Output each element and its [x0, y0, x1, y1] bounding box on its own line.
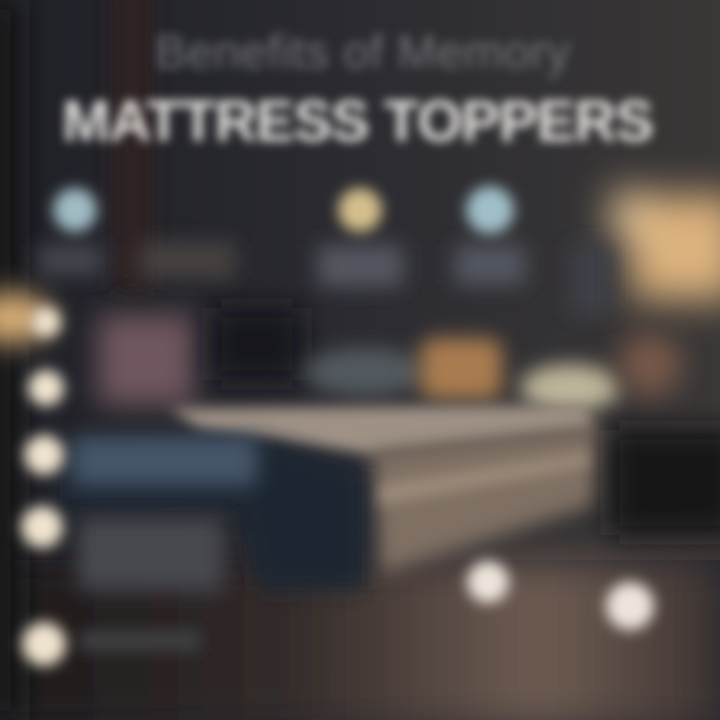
mattress stripe — [378, 452, 590, 505]
dark bedside right — [610, 430, 720, 535]
upper icon cards — [38, 242, 612, 315]
pillow orange — [420, 338, 502, 400]
pillow grey — [305, 348, 425, 396]
top icon: light blue — [466, 186, 514, 234]
lower left panel — [78, 518, 223, 590]
mattress side — [370, 425, 600, 575]
subtitle: Benefits of Memory — [155, 25, 571, 78]
main title: MATTRESS TOPPERS — [62, 89, 653, 154]
floor — [0, 560, 720, 720]
pink panel — [98, 315, 194, 405]
lamp glow left — [0, 292, 50, 344]
right warm pillow — [618, 333, 682, 397]
bottom panel — [80, 630, 200, 652]
floor icons — [467, 561, 654, 630]
left bullet icons — [21, 307, 66, 666]
dark curtain strip — [112, 0, 152, 290]
warm lamp glow right — [610, 187, 720, 300]
top icon: pale blue — [53, 188, 97, 232]
dark left edge — [0, 0, 20, 720]
wall background — [0, 0, 720, 560]
top icon: yellow — [338, 188, 382, 232]
dark blue bedding — [60, 440, 365, 590]
dark headboard — [212, 308, 302, 380]
pillow cream — [520, 364, 620, 412]
blue text panel — [72, 436, 257, 486]
mattress top — [170, 405, 595, 455]
